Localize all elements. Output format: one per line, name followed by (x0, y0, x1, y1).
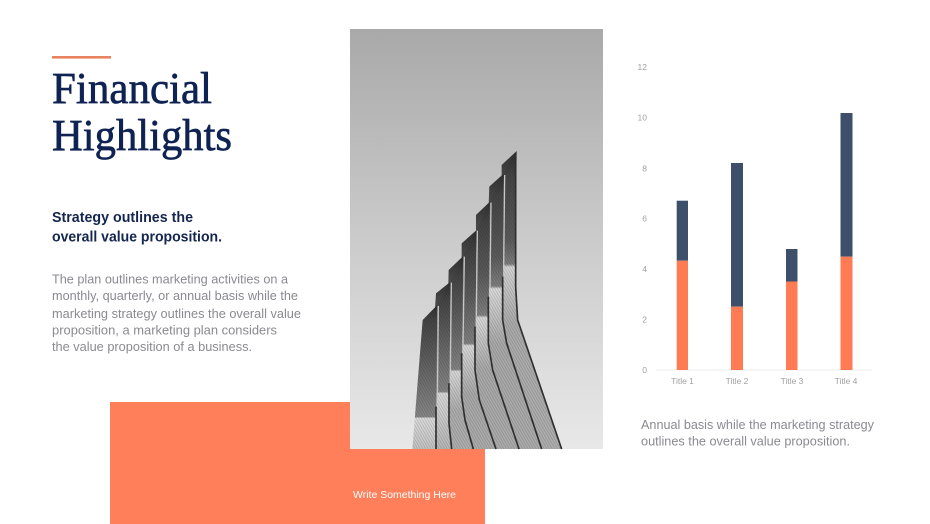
y axis labels: 2 (642, 314, 647, 324)
fin 1 (502, 151, 562, 449)
bar: Title 3 (786, 249, 798, 370)
title: Financial (52, 64, 212, 113)
panel caption: Write Something Here (353, 489, 456, 501)
stacked bar chart (638, 62, 872, 386)
x axis labels: Title 3 (781, 376, 804, 386)
y axis labels: 12 (638, 62, 647, 72)
x axis labels: Title 1 (671, 376, 694, 386)
fin surface hatching (412, 151, 562, 449)
fin 4 (462, 230, 496, 449)
bar: Title 1 (677, 201, 688, 370)
y axis labels: 0 (642, 365, 647, 375)
y axis labels (638, 62, 647, 375)
baseline (656, 369, 872, 371)
body text: The plan outlines marketing activities on a (52, 272, 288, 286)
subheading: overall value proposition. (52, 230, 222, 246)
body text: proposition, a marketing plan considers (52, 324, 277, 338)
x axis labels: Title 2 (726, 376, 749, 386)
bar: Title 2 (731, 163, 743, 370)
x axis labels (671, 376, 858, 386)
bar: Title 4 (840, 113, 852, 370)
fin 7 (412, 305, 437, 449)
subheading: Strategy outlines the (52, 210, 193, 226)
y axis labels: 6 (642, 214, 647, 224)
y axis labels: 8 (642, 164, 647, 174)
chart caption: outlines the overall value proposition. (641, 434, 850, 448)
chart caption: Annual basis while the marketing strategy (641, 418, 875, 432)
chart caption (641, 418, 875, 448)
body text: monthly, quarterly, or annual basis while the (52, 289, 298, 303)
y axis labels: 4 (642, 264, 647, 274)
title (52, 64, 232, 160)
fin 3 (475, 202, 519, 449)
fin 2 (488, 173, 542, 449)
body text: the value proposition of a business. (52, 340, 252, 354)
fin 5 (448, 256, 473, 449)
photo: building against grey sky (350, 29, 603, 449)
x axis labels: Title 4 (835, 376, 858, 386)
body text: marketing strategy outlines the overall value (52, 307, 301, 321)
y axis labels: 10 (638, 112, 647, 122)
accent line (52, 56, 111, 59)
orange panel (110, 402, 485, 524)
body text (52, 272, 301, 354)
title: Highlights (52, 111, 232, 160)
fin 6 (435, 282, 452, 449)
subheading (52, 210, 222, 246)
